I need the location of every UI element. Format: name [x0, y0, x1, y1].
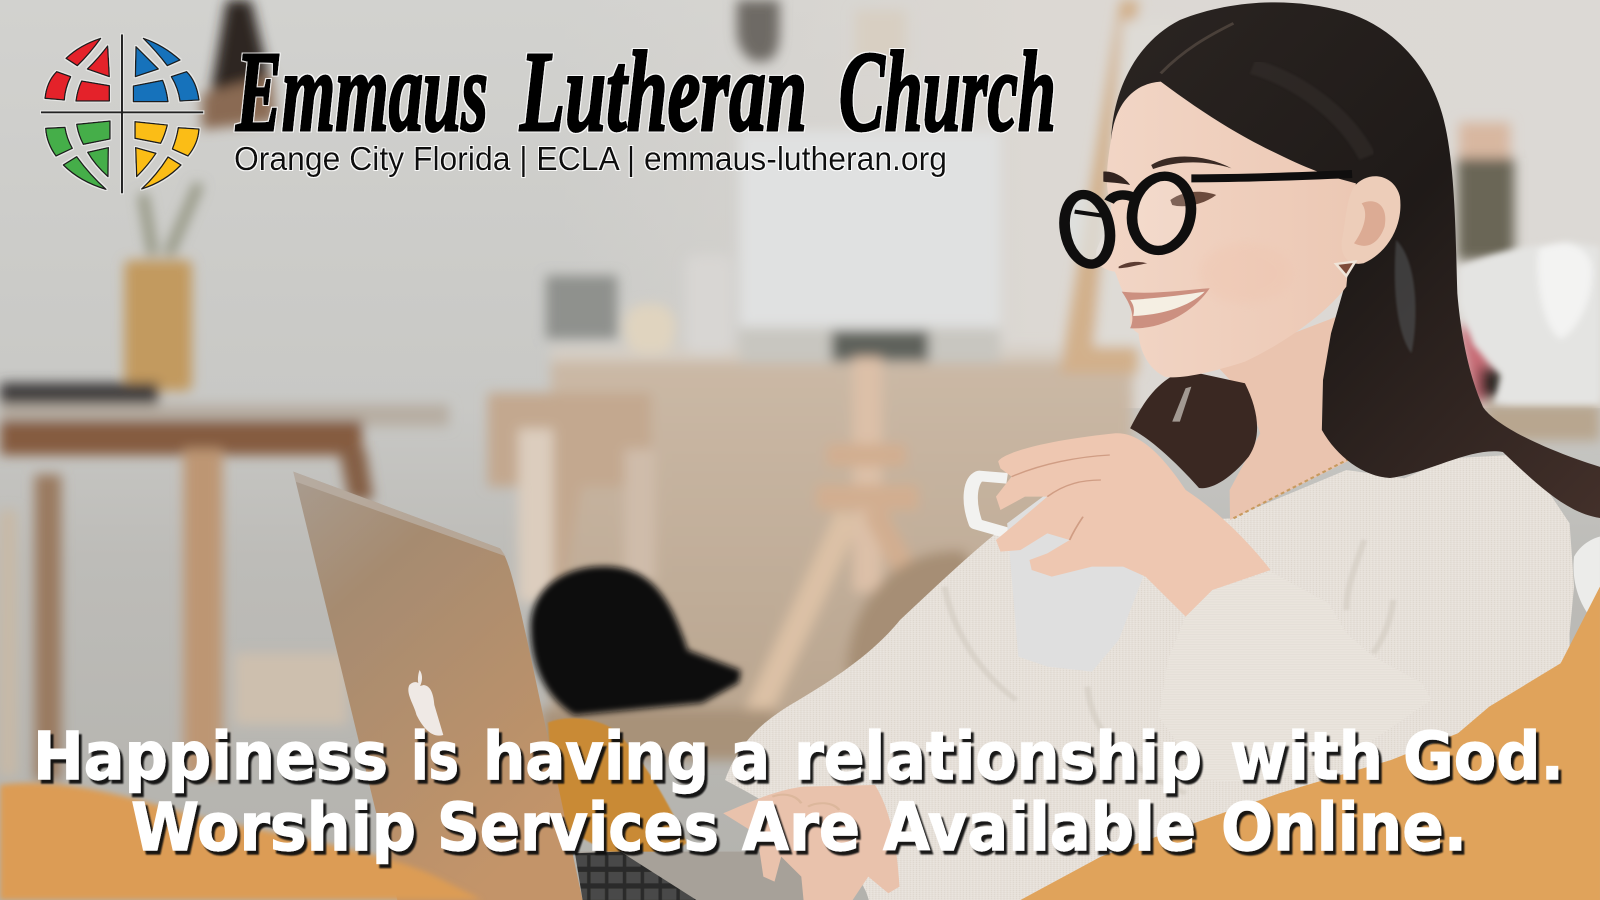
- message headline: a: [730, 718, 770, 795]
- yellow quadrant: [135, 122, 199, 189]
- logo: ELCA cross and globe: [41, 34, 203, 193]
- eye: [1170, 192, 1216, 206]
- title: church name: Church: [839, 28, 1056, 155]
- message headline: God.: [1403, 718, 1564, 795]
- front hair: [1130, 370, 1257, 488]
- orange blanket behind laptop: [548, 718, 687, 873]
- base and trackpad: [576, 852, 812, 900]
- woman: hand on keyboard: [723, 785, 900, 900]
- nose shadow: [1119, 262, 1147, 268]
- hat: [531, 566, 741, 715]
- mug: [971, 476, 1143, 672]
- glasses: [1060, 173, 1352, 267]
- message headline: Available: [883, 789, 1196, 866]
- lips: [1122, 288, 1210, 328]
- woman: sweater body: [725, 455, 1600, 900]
- green quadrant: [46, 121, 110, 189]
- message headline: Services: [437, 789, 719, 866]
- subtitle: Orange City Florida | ECLA | emmaus-lutheran.org: [234, 141, 947, 178]
- ear: [1342, 176, 1400, 264]
- woman: head and hair: [1060, 2, 1600, 520]
- hair highlight: [1161, 23, 1233, 73]
- blue quadrant: [133, 38, 199, 102]
- message headline: relationship: [794, 718, 1202, 795]
- laptop: [293, 472, 812, 900]
- sweater cuff: [1159, 572, 1431, 783]
- message headline: Online.: [1221, 789, 1467, 866]
- cross: [41, 34, 203, 193]
- message headline: Worship: [131, 789, 416, 866]
- eyebrow: [1151, 156, 1232, 169]
- cushion: lower right: [1021, 587, 1600, 900]
- rear hair: [1111, 2, 1600, 518]
- cushion: lower left: [0, 783, 482, 900]
- sweater folds: [945, 540, 1393, 793]
- message headline: with: [1230, 718, 1383, 795]
- teeth: [1130, 292, 1205, 316]
- message headline: Happiness: [33, 718, 388, 795]
- cheek shading: [1199, 243, 1291, 303]
- message headline: having: [483, 718, 709, 795]
- icon: laptop logo: [408, 670, 443, 736]
- face: [1096, 82, 1356, 377]
- woman: mug and hand: [971, 433, 1431, 783]
- message headline: is: [411, 718, 459, 795]
- title: church name: [235, 28, 1056, 155]
- bust sculpture: [1459, 241, 1600, 404]
- hair sheen below ear: [1395, 240, 1416, 353]
- message headline: Are: [742, 789, 860, 866]
- title: church name: Emmaus: [235, 28, 488, 155]
- red quadrant: [45, 38, 109, 101]
- message headline: [33, 718, 1564, 866]
- keyboard: [575, 852, 696, 900]
- hand holding mug: [996, 433, 1271, 617]
- neck: [1214, 317, 1350, 520]
- necklace: [1233, 458, 1350, 518]
- earring: [1336, 262, 1355, 276]
- title: church name: Lutheran: [519, 28, 807, 155]
